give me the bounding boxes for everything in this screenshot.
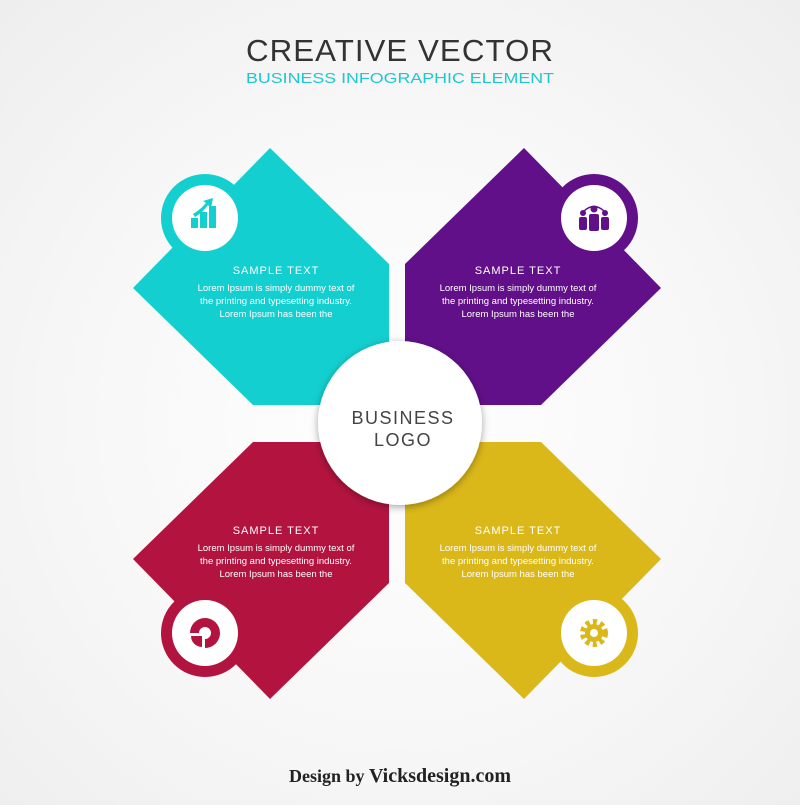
center logo circle: BUSINESS <box>351 408 455 428</box>
panel: bottom-right yellow: the printing and typesetting industry. <box>442 556 594 567</box>
panel: bottom-left red: SAMPLE TEXT <box>233 525 319 537</box>
panel: bottom-left red: Lorem Ipsum has been the <box>219 569 333 580</box>
center logo circle: LOGO <box>374 430 432 450</box>
panel: top-right purple: Lorem Ipsum is simply dummy text of <box>440 283 597 294</box>
panel: top-left cyan: Lorem Ipsum has been the <box>219 309 333 320</box>
panel: top-left cyan: SAMPLE TEXT <box>233 265 319 277</box>
panel: bottom-left red <box>133 442 389 699</box>
panel: top-right purple: the printing and typesetting industry. <box>442 296 594 307</box>
panel: bottom-right yellow: Lorem Ipsum is simply dummy text of <box>440 543 597 554</box>
subtitle: BUSINESS INFOGRAPHIC ELEMENT <box>246 70 554 87</box>
panel: top-right purple: Lorem Ipsum has been the <box>461 309 575 320</box>
panel: bottom-left red: the printing and typesetting industry. <box>200 556 352 567</box>
icon: gear <box>583 622 605 644</box>
panel: bottom-left red: Lorem Ipsum is simply dummy text of <box>198 543 355 554</box>
panel: bottom-right yellow <box>405 442 661 699</box>
panel: top-right purple <box>405 148 661 405</box>
icon: team <box>579 206 609 231</box>
panel: top-left cyan: the printing and typesetting industry. <box>200 296 352 307</box>
center logo circle <box>318 341 482 505</box>
panel: bottom-right yellow: Lorem Ipsum has been the <box>461 569 575 580</box>
panel: bottom-right yellow: SAMPLE TEXT <box>475 525 561 537</box>
icon: growth chart <box>191 198 216 228</box>
footer credit: Design by Vicksdesign.com <box>289 765 511 787</box>
panel: top-right purple: SAMPLE TEXT <box>475 265 561 277</box>
panel: top-left cyan: Lorem Ipsum is simply dummy text of <box>198 283 355 294</box>
panel: top-left cyan <box>133 148 389 405</box>
title: CREATIVE VECTOR <box>246 33 554 68</box>
icon: pie chart <box>190 618 220 648</box>
